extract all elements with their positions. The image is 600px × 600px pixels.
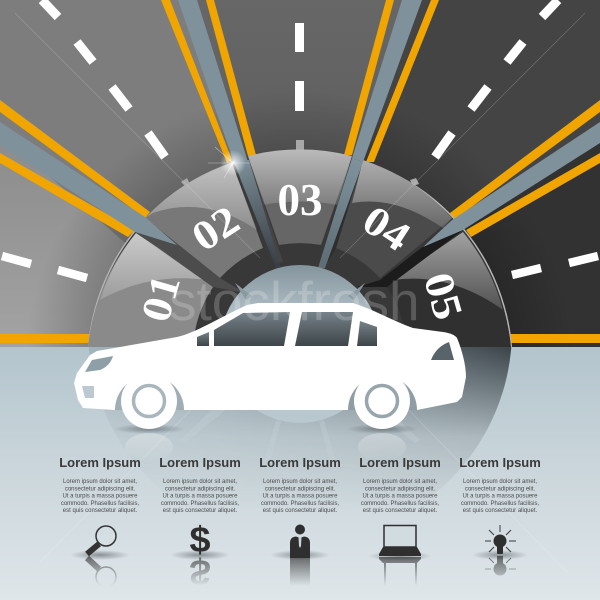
- column 5 body: commodo. Phasellus facilisis,: [461, 501, 540, 507]
- column 2 body: Ut a turpis a massa posuere: [162, 494, 238, 500]
- number 04: 04: [354, 196, 419, 261]
- column 3 body: est quis consectetur aliquet.: [263, 508, 338, 514]
- column 1 body: commodo. Phasellus facilisis,: [61, 501, 140, 507]
- column 2 text: [159, 455, 241, 514]
- column 4 heading: Lorem Ipsum: [359, 455, 441, 470]
- column 4 body: commodo. Phasellus facilisis,: [361, 501, 440, 507]
- road network: [0, 0, 600, 347]
- floor: [0, 347, 600, 600]
- reflected hub: [258, 410, 343, 423]
- column 1 body: Lorem ipsum dolor sit amet,: [63, 479, 137, 485]
- column 3 body: Lorem ipsum dolor sit amet,: [263, 479, 337, 485]
- column 5 body: consectetur adipiscing elit.: [465, 486, 536, 492]
- car body: [74, 303, 466, 410]
- column 2 body: est quis consectetur aliquet.: [163, 508, 238, 514]
- segment numbers: [132, 175, 472, 327]
- reflected spokes: [320, 420, 410, 432]
- central hub: [226, 265, 372, 316]
- wheel reflections: [125, 433, 406, 461]
- road 2: [0, 0, 280, 300]
- column 4 body: consectetur adipiscing elit.: [365, 486, 436, 492]
- column 4 body: est quis consectetur aliquet.: [363, 508, 438, 514]
- column 5 body: Lorem ipsum dolor sit amet,: [463, 479, 537, 485]
- column 2 body: commodo. Phasellus facilisis,: [161, 501, 240, 507]
- icon: dollar: [173, 524, 226, 584]
- column 3 text: [259, 455, 341, 514]
- road 5: [350, 133, 600, 347]
- column 3 body: commodo. Phasellus facilisis,: [261, 501, 340, 507]
- column 5 body: est quis consectetur aliquet.: [463, 508, 538, 514]
- column 5 heading: Lorem Ipsum: [459, 455, 541, 470]
- column 1 body: Ut a turpis a massa posuere: [62, 494, 138, 500]
- orange road edges: [0, 0, 600, 343]
- column 3 heading: Lorem Ipsum: [259, 455, 341, 470]
- icon: businessman: [273, 524, 327, 584]
- segment 03: [248, 150, 352, 245]
- road 3: [188, 0, 412, 300]
- star sparkle: [208, 147, 250, 178]
- gauge base ring: [88, 158, 512, 347]
- reflected disc: [88, 347, 512, 486]
- icon: light bulb: [475, 525, 525, 576]
- lane dashes: [2, 0, 598, 278]
- segment 04: [336, 160, 452, 278]
- rear wheel: [348, 373, 417, 429]
- gauge reflection on floor: [88, 347, 512, 486]
- column 1 heading: Lorem Ipsum: [59, 455, 141, 470]
- column 1 body: est quis consectetur aliquet.: [63, 508, 138, 514]
- column 3 body: Ut a turpis a massa posuere: [262, 494, 338, 500]
- car: [74, 303, 466, 461]
- blue-grey ray bands: [0, 0, 600, 268]
- front wheel: [115, 373, 184, 429]
- dark separators: [136, 156, 463, 293]
- segment 01: [88, 233, 213, 347]
- column 1 text: [59, 455, 141, 514]
- column 5 text: [459, 455, 541, 514]
- segment 05: [387, 232, 511, 347]
- column 2 body: Lorem ipsum dolor sit amet,: [163, 479, 237, 485]
- number 05: 05: [415, 268, 472, 325]
- icon: magnifier: [73, 525, 127, 584]
- column 5 body: Ut a turpis a massa posuere: [462, 494, 538, 500]
- road 1: [0, 133, 250, 347]
- windows: [197, 312, 377, 346]
- circle shadow on roads: [0, 0, 600, 347]
- number 01: 01: [132, 270, 189, 327]
- fog lamp: [82, 386, 94, 398]
- headlight: [85, 356, 113, 372]
- column 1 body: consectetur adipiscing elit.: [65, 486, 136, 492]
- road 4: [320, 0, 600, 300]
- hub spokes: [235, 283, 365, 300]
- number 02: 02: [183, 196, 248, 261]
- tail light: [431, 342, 454, 360]
- watermark: stockfresh: [169, 270, 420, 332]
- column 3 body: consectetur adipiscing elit.: [265, 486, 336, 492]
- column 4 body: Lorem ipsum dolor sit amet,: [363, 479, 437, 485]
- column 2 body: consectetur adipiscing elit.: [165, 486, 236, 492]
- icon: dollar: $: [189, 552, 211, 592]
- number 03: 03: [278, 175, 322, 225]
- icon: dollar: $: [189, 520, 211, 560]
- lane ticks: [181, 140, 419, 186]
- column 4 text: [359, 455, 441, 514]
- segment 02: [145, 163, 263, 278]
- gauge semicircle: [0, 0, 600, 347]
- wheel shadows: [113, 424, 418, 434]
- column 4 body: Ut a turpis a massa posuere: [362, 494, 438, 500]
- icon: laptop: [372, 524, 428, 584]
- column 2 heading: Lorem Ipsum: [159, 455, 241, 470]
